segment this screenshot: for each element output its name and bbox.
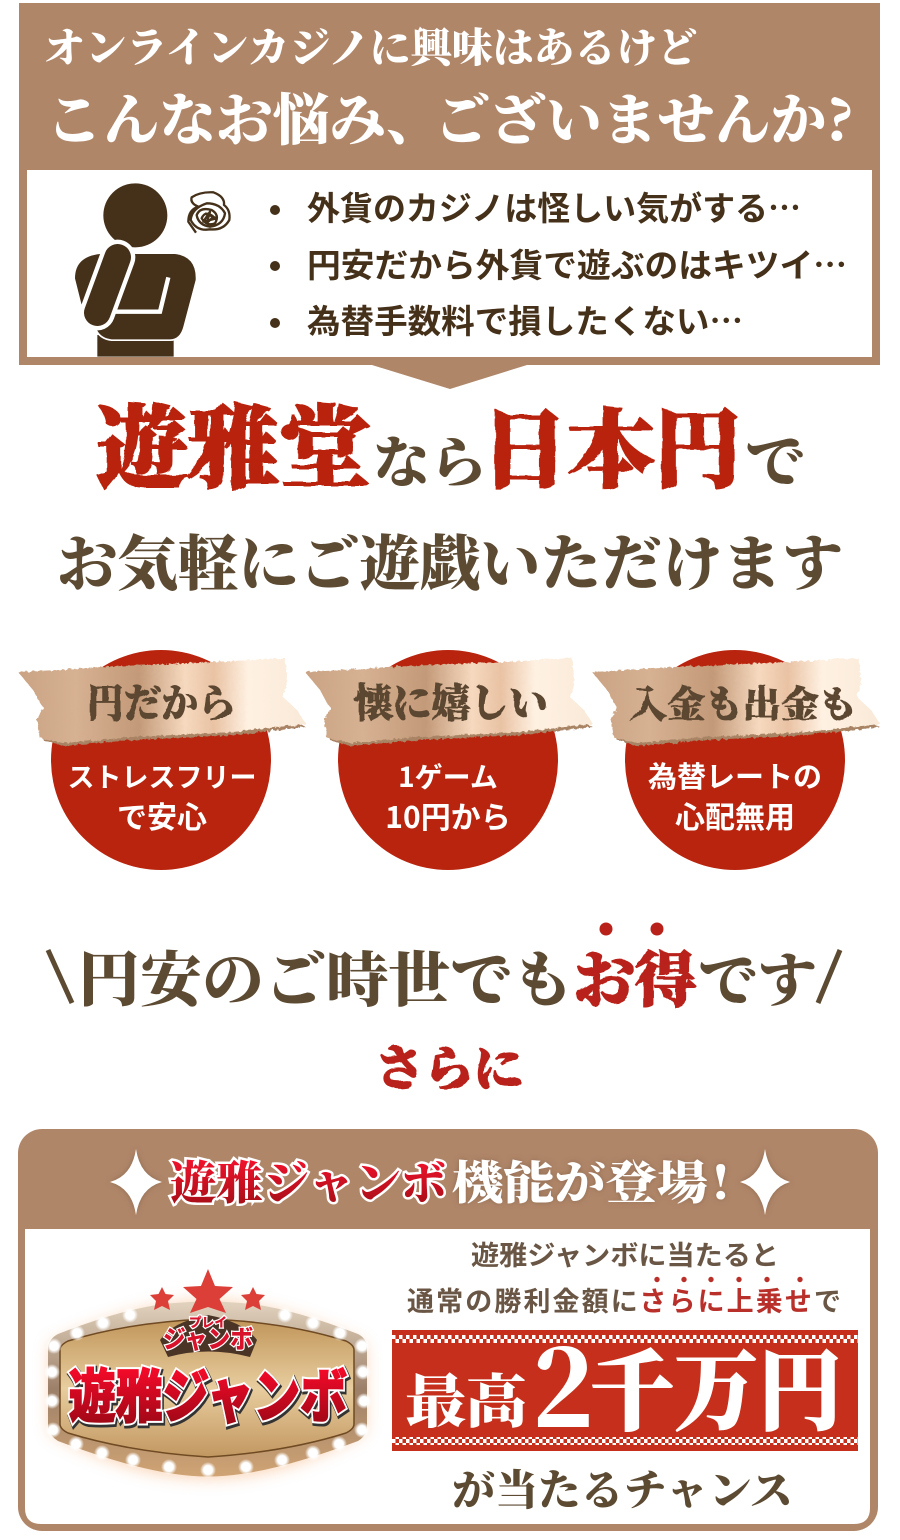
logo small title: プレイ bbox=[189, 1312, 227, 1331]
logo main title: 遊雅ジャンボ bbox=[69, 1350, 347, 1434]
heading: question bbox=[46, 77, 854, 157]
red circle bbox=[51, 650, 271, 870]
icon: right sparkle bbox=[740, 1149, 790, 1215]
panel title: feature: ! bbox=[712, 1147, 729, 1213]
panel title: feature: 機能が登場 bbox=[452, 1147, 708, 1213]
brand name: 遊雅堂 bbox=[96, 376, 371, 506]
chance text: が当たるチャンス bbox=[452, 1458, 793, 1518]
text: 円安のご時世でも bbox=[78, 933, 574, 1019]
bullet 3: 為替手数料で損したくない… bbox=[307, 295, 743, 343]
circle text bbox=[385, 756, 511, 837]
heading: question: ございませんか? bbox=[434, 77, 854, 157]
logo main title: 遊雅ジャンボ bbox=[70, 1352, 348, 1436]
text end: です bbox=[698, 934, 817, 1018]
circle text bbox=[648, 754, 822, 837]
prize amount: 千万円 bbox=[590, 1323, 842, 1449]
circle text: で安心 bbox=[117, 793, 207, 837]
panel background bbox=[18, 1129, 878, 1531]
circle text: 1ゲーム bbox=[398, 756, 498, 796]
subheadline: お気軽にご遊戯いただけます bbox=[57, 517, 843, 603]
emphasis dots bbox=[600, 922, 664, 936]
panel background bbox=[19, 3, 880, 389]
circle text: 10円から bbox=[385, 793, 511, 837]
nara: なら bbox=[373, 419, 487, 498]
red circle bbox=[625, 650, 845, 870]
banner label: 入金も出金も bbox=[629, 674, 857, 728]
brush banner bbox=[305, 658, 593, 743]
description bbox=[407, 1234, 841, 1319]
logo small title: ジャンボ bbox=[163, 1320, 253, 1356]
icon: left sparkle bbox=[110, 1149, 162, 1215]
list of worries bbox=[270, 182, 847, 343]
emphasised text: お得 bbox=[573, 933, 697, 1019]
right slash bbox=[818, 950, 840, 1003]
feature 3 bbox=[592, 650, 880, 870]
bullet 1: 外貨のカジノは怪しい気がする… bbox=[307, 182, 801, 230]
sarani: さらに bbox=[375, 1030, 523, 1099]
line 1: 遊雅ジャンボに当たると bbox=[471, 1234, 779, 1273]
logo frame bbox=[48, 1302, 367, 1476]
heading: lead: オンラインカジノに興味はあるけど bbox=[44, 15, 698, 74]
heading: question: 、 bbox=[386, 77, 442, 157]
red circle bbox=[338, 650, 558, 870]
checker top bbox=[392, 1335, 858, 1343]
panel: jumbo bbox=[18, 1129, 878, 1531]
headline: good value bbox=[48, 922, 840, 1019]
de: で bbox=[745, 415, 805, 499]
brush banner bbox=[592, 658, 880, 743]
yen: 日本円 bbox=[481, 381, 741, 505]
prize label: 最高 bbox=[405, 1355, 527, 1439]
logo: yuga jumbo bbox=[44, 1269, 372, 1478]
brush banner bbox=[18, 658, 306, 743]
emphasis dots bbox=[654, 1277, 803, 1282]
panel inner white bbox=[25, 1229, 870, 1524]
circle text: 為替レートの bbox=[648, 754, 822, 796]
logo lights bbox=[44, 1307, 372, 1478]
brush banner shadow bbox=[40, 720, 306, 746]
logo stars bbox=[150, 1269, 265, 1313]
headline: yen bbox=[96, 376, 805, 506]
panel title: jumbo: 遊雅ジャンボ bbox=[170, 1147, 447, 1213]
feature 1 bbox=[18, 650, 306, 870]
banner background bbox=[392, 1330, 858, 1451]
feature 2 bbox=[305, 650, 593, 870]
checker bottom bbox=[392, 1437, 858, 1445]
brush banner shadow bbox=[614, 720, 880, 746]
panel: worries bbox=[19, 3, 880, 389]
banner label: 懐に嬉しい bbox=[354, 673, 548, 729]
logo glow bbox=[50, 1300, 365, 1478]
logo plate bbox=[60, 1319, 354, 1457]
circle text: 心配無用 bbox=[675, 793, 795, 837]
banner label: 円だから bbox=[87, 673, 235, 729]
bullet 2: 円安だから外貨で遊ぶのはキツイ… bbox=[307, 239, 847, 287]
prize banner bbox=[392, 1306, 858, 1458]
brush banner shadow bbox=[327, 720, 593, 746]
panel inner white bbox=[27, 170, 872, 357]
heading: question: こんなお悩み bbox=[46, 77, 386, 157]
prize digit: 2 bbox=[532, 1306, 594, 1458]
left slash bbox=[48, 950, 72, 1003]
circle text bbox=[68, 756, 256, 837]
logo main title: 遊雅ジャンボ bbox=[69, 1350, 347, 1434]
icon: worried person bbox=[75, 183, 230, 357]
logo small badge bbox=[160, 1315, 257, 1357]
line 2: 通常の勝利金額にさらに上乗せで bbox=[407, 1280, 841, 1319]
circle text: ストレスフリー bbox=[68, 756, 256, 795]
